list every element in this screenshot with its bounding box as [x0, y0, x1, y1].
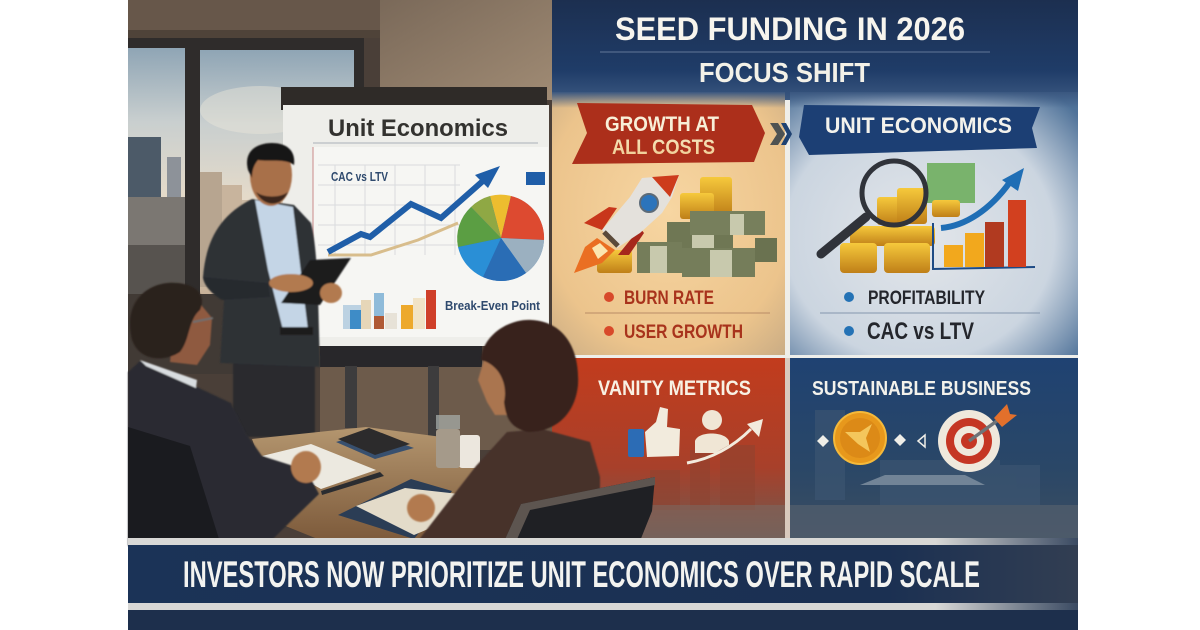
seated woman [407, 320, 600, 546]
icon: thumbs up [628, 407, 680, 457]
metric: profitability: PROFITABILITY [868, 288, 985, 309]
blue banner [799, 105, 1040, 155]
icon: coin stacks and cash [637, 177, 777, 277]
metric: user growth: USER GROWTH [624, 322, 743, 343]
metric: CAC vs LTV: CAC vs LTV [867, 318, 974, 345]
panel: vanity metrics [552, 358, 785, 540]
panel: growth at all costs: ALL COSTS [612, 136, 715, 159]
panel: growth at all costs [552, 92, 785, 356]
whiteboard [281, 87, 549, 441]
line chart [328, 166, 500, 255]
metric: CAC vs LTV [844, 318, 974, 345]
pie chart [457, 195, 544, 281]
table [252, 427, 480, 546]
skyline texture [650, 445, 755, 510]
chart label: CAC vs LTV [331, 169, 388, 184]
panel: sustainable business: SUSTAINABLE BUSINESS [812, 378, 1031, 400]
arrow: shift chevrons [770, 123, 792, 145]
panel: growth at all costs: GROWTH AT [605, 113, 719, 136]
bar chart with arrow [933, 168, 1035, 269]
metric: burn rate: BURN RATE [624, 288, 714, 309]
woman's chair [502, 477, 655, 546]
heading: SEED FUNDING IN 2026 [615, 11, 965, 47]
panel: bottom banner [128, 538, 1078, 630]
red banner [572, 103, 765, 164]
panel: unit economics: UNIT ECONOMICS [825, 113, 1012, 138]
board title: Unit Economics [328, 115, 508, 142]
icon: magnifier and coins [821, 161, 975, 273]
icon: gold coin [834, 412, 886, 464]
break-even label: Break-Even Point [445, 298, 541, 313]
seated man [128, 283, 321, 546]
window with skyline [128, 38, 364, 298]
chart grid [318, 165, 460, 255]
icon: connector markers [817, 434, 925, 447]
panel: vanity metrics: VANITY METRICS [598, 377, 751, 400]
metric: burn rate [604, 288, 714, 309]
panel: unit economics [790, 92, 1078, 356]
skyline texture [815, 410, 1040, 505]
bar chart [343, 290, 436, 329]
icon: target with dart [938, 404, 1017, 472]
man's chair [128, 427, 219, 546]
icon: rocket [574, 175, 679, 273]
back wall behind easel [320, 360, 552, 450]
presenter [203, 143, 351, 437]
panel: right infographic [552, 0, 1078, 540]
icon: user with trend arrow [687, 410, 763, 463]
subheading: FOCUS SHIFT [699, 57, 870, 88]
panel: office scene background [128, 0, 552, 546]
panel: sustainable business [790, 358, 1078, 540]
table items [262, 415, 480, 539]
easel stand [320, 346, 482, 441]
